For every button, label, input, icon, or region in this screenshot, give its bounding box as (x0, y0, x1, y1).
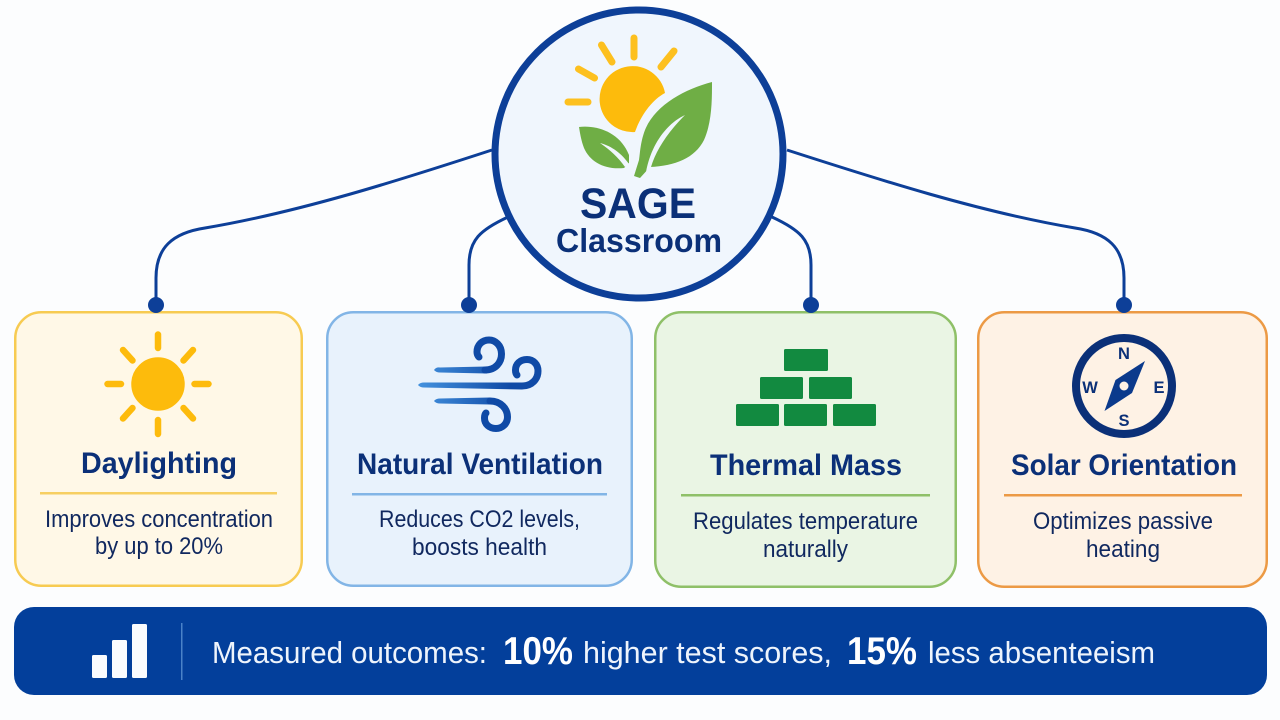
text: outcomes statement: higher test scores, (583, 635, 832, 670)
panel: daylighting (15, 312, 302, 586)
text: solar description: Optimizes passive (1033, 508, 1213, 535)
heading: daylighting: Daylighting (81, 447, 237, 480)
panel: natural ventilation (327, 312, 632, 586)
heading: thermal mass: Thermal Mass (710, 449, 902, 482)
icon: compass: E (1153, 379, 1165, 397)
text: ventilation description (379, 506, 580, 561)
panel: solar orientation (978, 312, 1267, 587)
title: SAGE: SAGE (580, 180, 696, 228)
icon: sun and leaves logo (568, 38, 712, 178)
text: ventilation description: Reduces CO2 levels, (379, 506, 580, 533)
connector lines from hub to cards (156, 150, 1124, 304)
subtitle: Classroom: Classroom (556, 222, 722, 259)
text: solar description (1033, 508, 1213, 563)
heading: solar orientation: Solar Orientation (1011, 449, 1237, 482)
text: outcomes statement: Measured outcomes: (212, 635, 487, 670)
heading: natural ventilation: Natural Ventilation (357, 448, 603, 481)
text: outcomes statement (212, 630, 1155, 673)
text: outcomes statement: 15% (847, 630, 917, 673)
text: outcomes statement: less absenteeism (928, 635, 1155, 670)
icon: wind (418, 340, 538, 428)
icon: compass: S (1118, 412, 1130, 430)
text: daylighting description: by up to 20% (95, 533, 223, 560)
connector dots (148, 297, 1132, 313)
icon: bar chart (92, 624, 147, 678)
panel: thermal mass (655, 312, 956, 587)
text: thermal description (693, 508, 918, 563)
icon: sun (108, 334, 208, 434)
icon: compass (1076, 338, 1172, 434)
icon: compass: W (1082, 379, 1098, 397)
icon: compass: N (1118, 345, 1130, 363)
hub: SAGE Classroom (495, 10, 783, 298)
text: thermal description: Regulates temperature (693, 508, 918, 535)
text: daylighting description: Improves concentration (45, 506, 273, 533)
banner: measured outcomes (14, 607, 1267, 695)
text: ventilation description: boosts health (412, 534, 547, 561)
text: solar description: heating (1086, 536, 1160, 563)
text: outcomes statement: 10% (503, 630, 573, 673)
text: daylighting description (45, 506, 273, 560)
text: thermal description: naturally (763, 536, 848, 563)
icon: bricks (736, 349, 876, 426)
